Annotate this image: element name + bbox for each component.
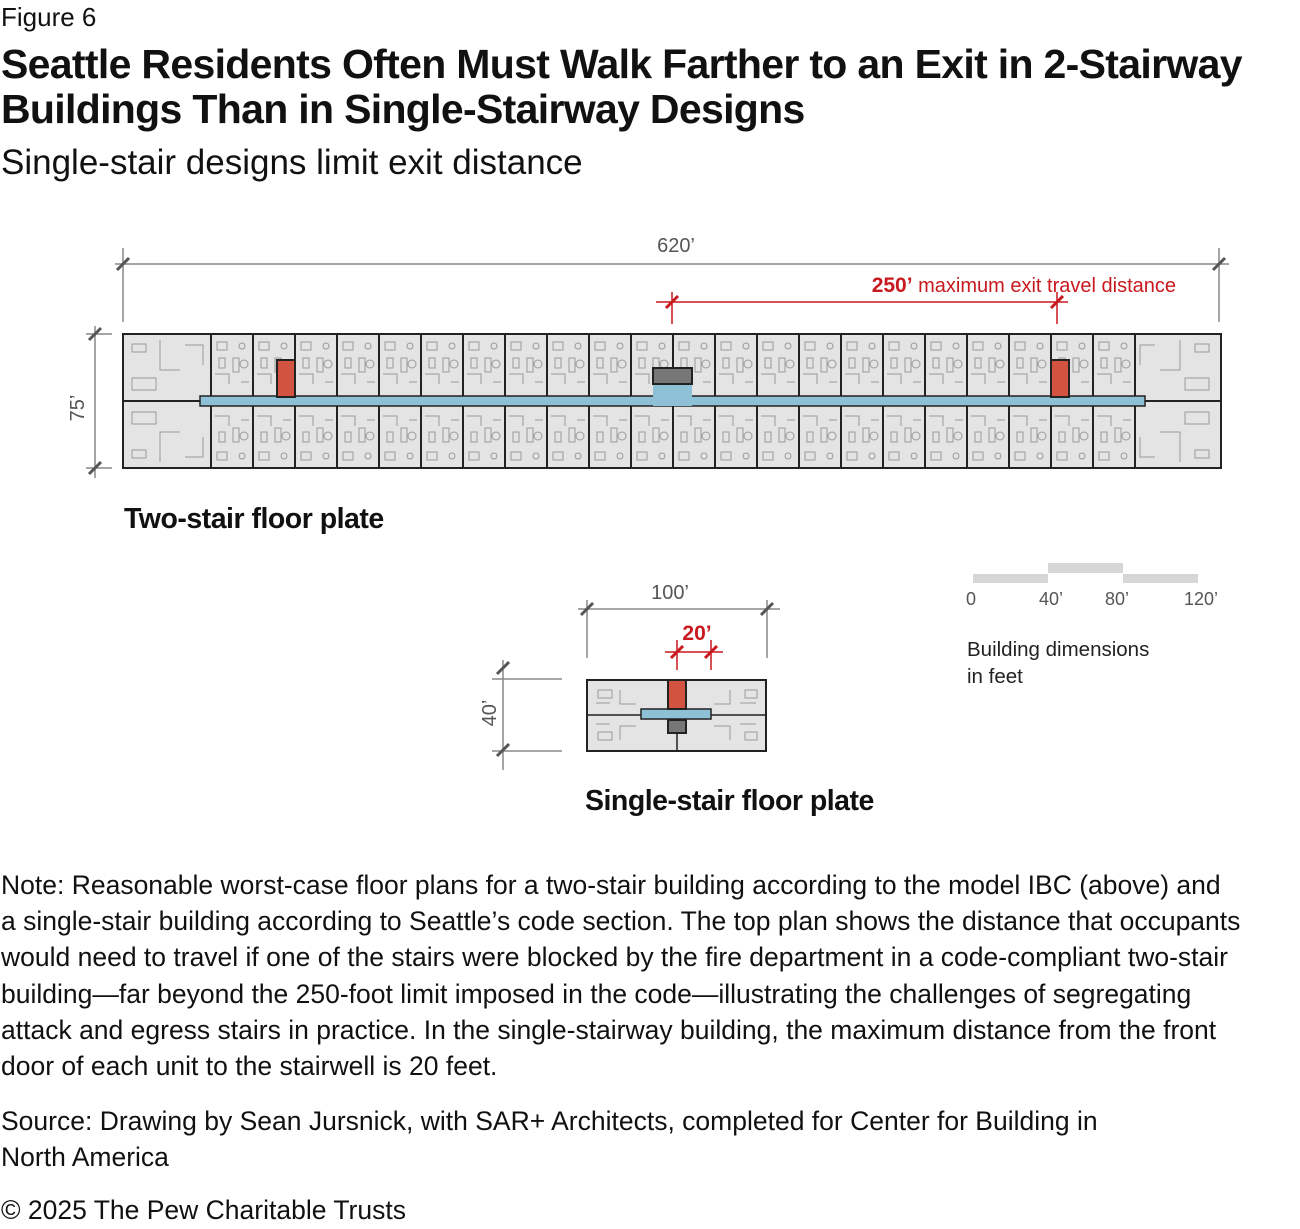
diagram: 620’ xyxy=(657,235,695,257)
note: door of each unit to the stairwell is 20 feet. xyxy=(1,1051,497,1081)
dimension: 20 feet (red) xyxy=(665,640,723,670)
subtitle: Single-stair designs limit exit distance xyxy=(1,143,583,182)
dimension: 250 feet max exit travel xyxy=(656,292,1068,324)
stair left (red) xyxy=(277,360,295,397)
two-stair floor plate xyxy=(123,334,1221,468)
dimension: 40 feet xyxy=(492,660,562,770)
note xyxy=(1,870,1240,1081)
diagram: 250’ maximum exit travel distance xyxy=(872,274,1176,297)
source: Source: Drawing by Sean Jursnick, with SAR+ Architects, completed for Center for Building in North America xyxy=(1,1106,1098,1172)
diagram: 20’ xyxy=(682,622,712,645)
label: single-stair floor plate: Single-stair floor plate xyxy=(585,785,874,817)
scale legend text: in feet xyxy=(967,665,1023,688)
diagram: 75’ xyxy=(67,395,89,421)
dimension: 75 feet xyxy=(86,326,112,478)
scale bar: 120’ xyxy=(1184,589,1218,609)
note: Note: Reasonable worst-case floor plans for a two-stair building according to the model IBC (above) and xyxy=(1,870,1221,900)
diagram: 100’ xyxy=(651,582,689,604)
corridor xyxy=(200,396,1145,406)
note: building—far beyond the 250-foot limit imposed in the code—illustrating the challenges of segregating xyxy=(1,979,1191,1009)
center elevator/stair (grey) xyxy=(653,368,692,384)
title: Seattle Residents Often Must Walk Farther to an Exit in 2-Stairway Buildings Than in Single-Stairway Designs xyxy=(1,41,1242,132)
dimension: 100 feet xyxy=(578,600,780,658)
label: two-stair floor plate: Two-stair floor plate xyxy=(124,503,384,535)
figure label: Figure 6 xyxy=(1,2,96,32)
diagram xyxy=(67,235,1229,817)
scale bar: 40’ xyxy=(1039,589,1063,609)
scale bar: 0 xyxy=(966,589,976,609)
scale bar xyxy=(966,563,1218,609)
single-stair floor plate xyxy=(587,680,766,751)
copyright: © 2025 The Pew Charitable Trusts xyxy=(1,1195,406,1225)
diagram: 40’ xyxy=(479,700,501,726)
note: would need to travel if one of the stairs were blocked by the fire department in a code-compliant two-stair xyxy=(1,942,1228,972)
note: a single-stair building according to Seattle’s code section. The top plan shows the distance that occupants xyxy=(1,906,1240,936)
note: attack and egress stairs in practice. In the single-stairway building, the maximum distance from the front xyxy=(1,1015,1216,1045)
scale legend text: Building dimensions xyxy=(967,638,1149,661)
dimension: 620 feet xyxy=(115,248,1229,322)
stair right (red) xyxy=(1051,360,1069,397)
scale bar: 80’ xyxy=(1105,589,1129,609)
